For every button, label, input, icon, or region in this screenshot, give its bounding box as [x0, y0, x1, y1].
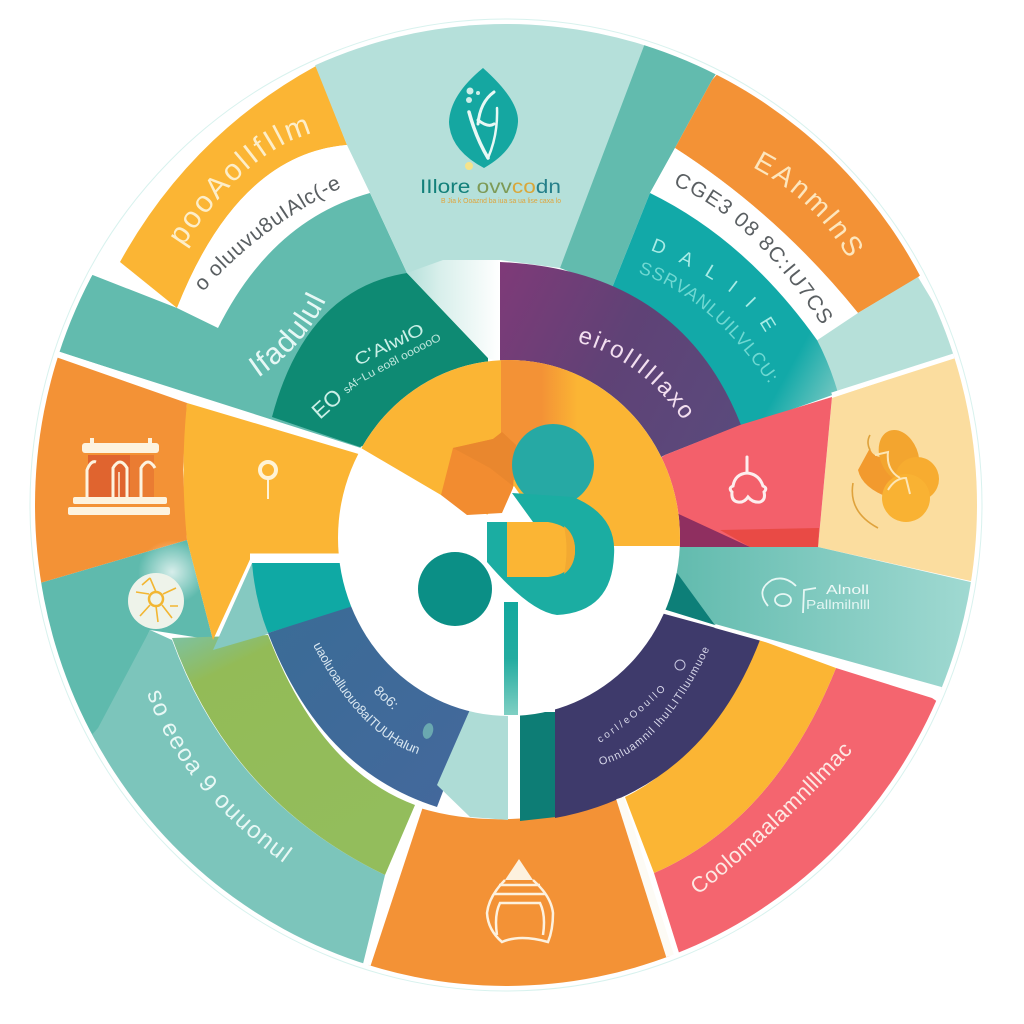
panel: top light teal — [305, 20, 655, 273]
panel divider: bottom orange right — [620, 798, 672, 962]
panel divider: teal and yellow — [250, 554, 339, 560]
panel: pale triangle — [213, 563, 268, 650]
panel divider: cream top — [832, 354, 960, 395]
small oval — [421, 722, 435, 740]
panel: green ring segment — [172, 635, 415, 875]
icon: dome — [487, 859, 553, 942]
hub polygon shade — [453, 432, 516, 486]
panel divider: right teal lower — [715, 626, 945, 690]
hub white notch — [487, 486, 542, 526]
panel: teal ring segment — [612, 193, 838, 428]
logo title: IIlore ovv codn — [420, 177, 561, 198]
panel: top-right teal strip — [560, 45, 716, 286]
glow near medallion — [140, 542, 199, 600]
line two: SSRVANLUILVLCU: — [640, 262, 776, 382]
text: coral: Coolomaalamnlllmac — [692, 744, 851, 892]
short line: 8o6: — [371, 682, 402, 712]
small glyph — [675, 660, 685, 670]
panel: teal ring segment lower-left — [252, 563, 352, 633]
heading: purple: eiroIIIIIaxo — [579, 331, 692, 418]
text: bottom-left teal: so eeoa 9 ouuonul — [148, 690, 293, 862]
panel: upper-left teal band — [30, 193, 407, 450]
right teal label — [762, 578, 870, 613]
panel: top-right orange — [675, 74, 920, 313]
logo tagline: B Jia k Ooaznd ba iua sa ua lise caxa lo — [441, 198, 561, 205]
panel: right teal — [676, 547, 971, 690]
panel: coral — [654, 668, 936, 952]
row one: C'AlwlO — [351, 320, 427, 370]
icon: medallion — [128, 573, 184, 629]
upper bowl — [512, 424, 594, 506]
panel: left teal — [41, 540, 212, 741]
yellow counter — [507, 522, 575, 577]
line one: D A L I I E — [652, 238, 776, 332]
panel: fading wedge — [407, 260, 500, 362]
text: white strip right: CGE3 08 8C:IU7CS — [676, 174, 832, 323]
hub yellow top — [361, 340, 690, 546]
icon: temple — [68, 438, 170, 515]
row two: Lu eo8l oooooO — [360, 332, 444, 384]
panel: top-left yellow — [120, 66, 347, 308]
small glyphs: sAf~ — [341, 373, 366, 396]
label line one: Alnoll — [826, 582, 869, 597]
heading: teal band left: Ifadulul — [248, 292, 326, 376]
heading: top-right orange: EAnmlnS — [754, 151, 862, 256]
panel: pale bottom wedge — [437, 705, 508, 820]
panel: bottom orange — [368, 797, 670, 986]
panel: dark teal wedge right — [666, 573, 715, 625]
panel: top-right white strip — [650, 148, 858, 313]
dome outline — [487, 880, 553, 942]
counter shade — [564, 526, 575, 574]
red lower band — [720, 528, 819, 547]
label line two: Pallmilnlll — [806, 597, 870, 612]
icon: red panel glyph — [730, 457, 766, 502]
icon: leaf mark — [449, 68, 518, 170]
text: dark green — [307, 320, 444, 424]
panel: top-right light teal — [817, 277, 954, 390]
panel: left yellow pointer — [184, 403, 362, 640]
panel: dark teal bottom wedge — [520, 712, 556, 821]
text: blue segment — [314, 642, 434, 754]
panel: bottom-left light teal — [92, 630, 385, 964]
panel: top-left white strip — [177, 145, 347, 308]
icon: ring mark — [762, 578, 816, 613]
panel: red — [650, 397, 832, 547]
line two: Onnluamnil lhuILITlluumuoe — [599, 648, 709, 764]
panel: blue ring segment — [268, 600, 474, 807]
panel: yellow ring segment — [625, 640, 836, 873]
large glyphs: EO — [307, 384, 347, 424]
long line: uaoluoalluouo8aITUUHaIun — [314, 642, 419, 754]
hub orange gradient quadrant — [501, 355, 591, 480]
text: navy segment — [598, 648, 709, 764]
text: teal ring — [640, 238, 776, 382]
hub white disc — [338, 360, 680, 716]
icon: pin — [260, 462, 276, 499]
hub orange polygon — [441, 432, 516, 515]
icon: orange blossom — [852, 424, 939, 528]
panel: navy ring segment — [555, 614, 760, 818]
center hub — [338, 340, 690, 716]
maroon wedge — [678, 514, 750, 547]
top logo — [420, 68, 561, 205]
hub teal letter shape — [487, 424, 614, 615]
lower bowl — [487, 493, 614, 615]
panel divider: upper-left — [70, 355, 360, 450]
hub stem — [504, 602, 518, 715]
panel: dark green ring segment — [272, 273, 488, 447]
panel divider: bottom orange left — [366, 803, 421, 970]
dome tip — [505, 859, 533, 880]
panel: left orange — [35, 358, 187, 583]
panel: cream — [818, 357, 977, 582]
panel: purple ring segment — [500, 262, 741, 457]
text: white strip left: o oluuvu8uIAlc(-e — [197, 179, 340, 290]
line one: corl/eOoullO — [598, 686, 664, 742]
hub teal dot — [418, 552, 492, 626]
